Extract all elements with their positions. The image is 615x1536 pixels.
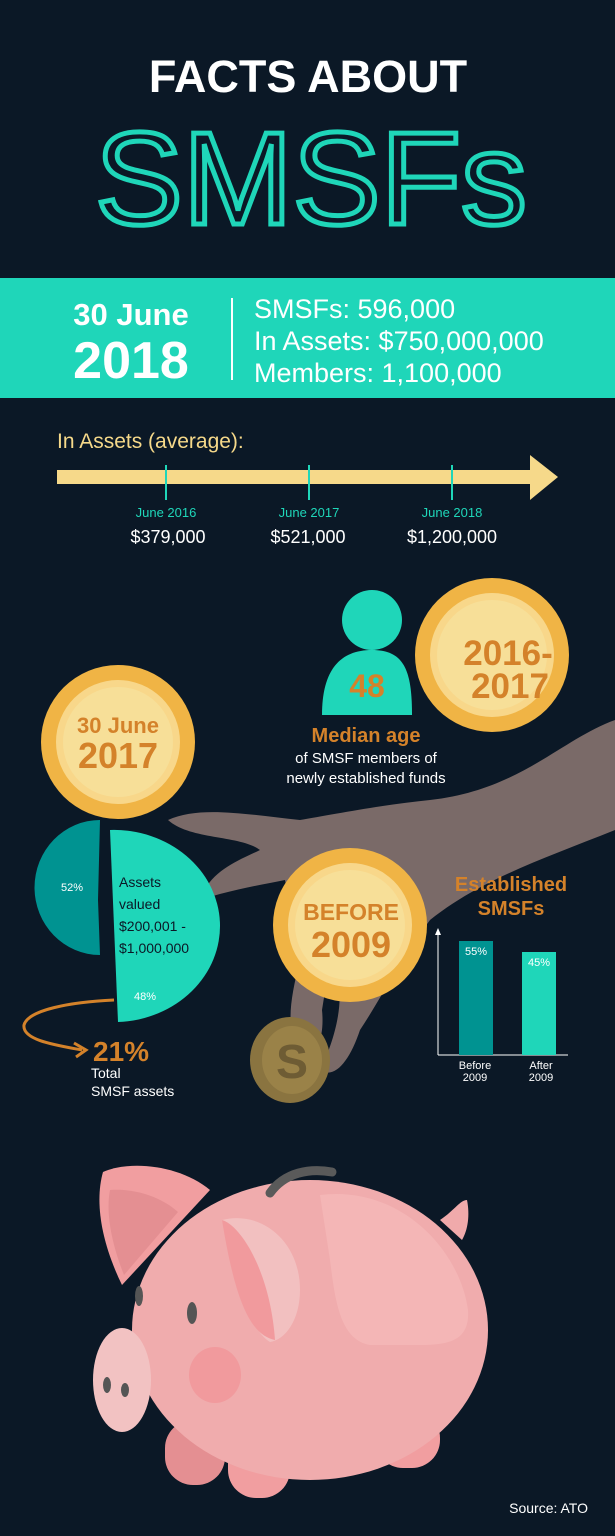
icon: person median age: 48 xyxy=(349,668,385,704)
text: median age: newly established funds xyxy=(286,770,446,787)
icon: falling coin xyxy=(250,1017,330,1103)
pie chart: asset share: $1,000,000 xyxy=(119,940,189,956)
title: FACTS ABOUT xyxy=(149,51,467,102)
timeline: average assets: $1,200,000 xyxy=(407,527,497,547)
piggy bank xyxy=(93,1166,488,1498)
coin: before 2009: 2009 xyxy=(311,924,391,965)
text: 21% total assets: SMSF assets xyxy=(91,1083,174,1099)
source: Source: ATO xyxy=(509,1500,588,1516)
timeline: average assets: June 2018 xyxy=(422,505,482,520)
pie chart: asset share: Assets xyxy=(119,874,161,890)
bar chart: established SMSFs: SMSFs xyxy=(478,898,544,920)
bar chart: established SMSFs xyxy=(435,874,568,1084)
coin: 2016-2017: 2016- xyxy=(463,634,553,673)
text: median age: Median age xyxy=(312,725,420,747)
banner: 30 June 2018: 2018 xyxy=(73,332,189,390)
icon: person median age xyxy=(322,590,412,715)
icon: falling coin: S xyxy=(276,1036,308,1089)
bar chart: established SMSFs: 2009 xyxy=(529,1072,553,1084)
timeline: average assets: June 2016 xyxy=(136,505,196,520)
timeline: average assets: In Assets (average): xyxy=(57,430,244,453)
text: 21% total assets: 21% xyxy=(93,1036,149,1067)
bar chart: established SMSFs: Before xyxy=(459,1060,491,1072)
text: median age: of SMSF members of xyxy=(295,750,438,767)
timeline: average assets: $521,000 xyxy=(270,527,346,547)
banner: 30 June 2018: SMSFs: 596,000 xyxy=(254,294,455,324)
hand xyxy=(168,720,615,1073)
coin: before 2009 xyxy=(273,848,427,1002)
banner: 30 June 2018: 30 June xyxy=(73,297,189,332)
bar chart: established SMSFs: Established xyxy=(455,874,567,896)
bar chart: established SMSFs: 55% xyxy=(465,946,487,958)
text: 21% total assets xyxy=(91,1036,174,1099)
coin: 2016-2017: 2017 xyxy=(471,667,549,706)
pie chart: asset share: valued xyxy=(119,896,160,912)
coin: 2016-2017 xyxy=(415,578,569,732)
bar chart: established SMSFs: 2009 xyxy=(463,1072,487,1084)
bar chart: established SMSFs: 45% xyxy=(528,957,550,969)
coin: 30 June 2017 xyxy=(41,665,195,819)
timeline: average assets: June 2017 xyxy=(279,505,339,520)
bar chart: established SMSFs: After xyxy=(529,1060,553,1072)
pie chart: asset share xyxy=(35,820,220,1022)
banner: 30 June 2018: Members: 1,100,000 xyxy=(254,358,502,388)
pie chart: asset share: 48% xyxy=(134,991,156,1003)
text: 21% total assets: Total xyxy=(91,1065,121,1081)
timeline: average assets: $379,000 xyxy=(130,527,206,547)
coin: before 2009: BEFORE xyxy=(303,899,399,925)
arrow: to 21% xyxy=(24,1000,114,1057)
coin: 30 June 2017: 2017 xyxy=(78,735,158,776)
title: SMSFs xyxy=(95,105,527,252)
coin: 30 June 2017: 30 June xyxy=(77,713,159,738)
pie chart: asset share: $200,001 - xyxy=(119,918,186,934)
timeline: average assets xyxy=(57,430,558,547)
pie chart: asset share: 52% xyxy=(61,882,83,894)
text: median age xyxy=(286,725,446,787)
banner: 30 June 2018: In Assets: $750,000,000 xyxy=(254,326,544,356)
banner: 30 June 2018 xyxy=(0,278,615,398)
